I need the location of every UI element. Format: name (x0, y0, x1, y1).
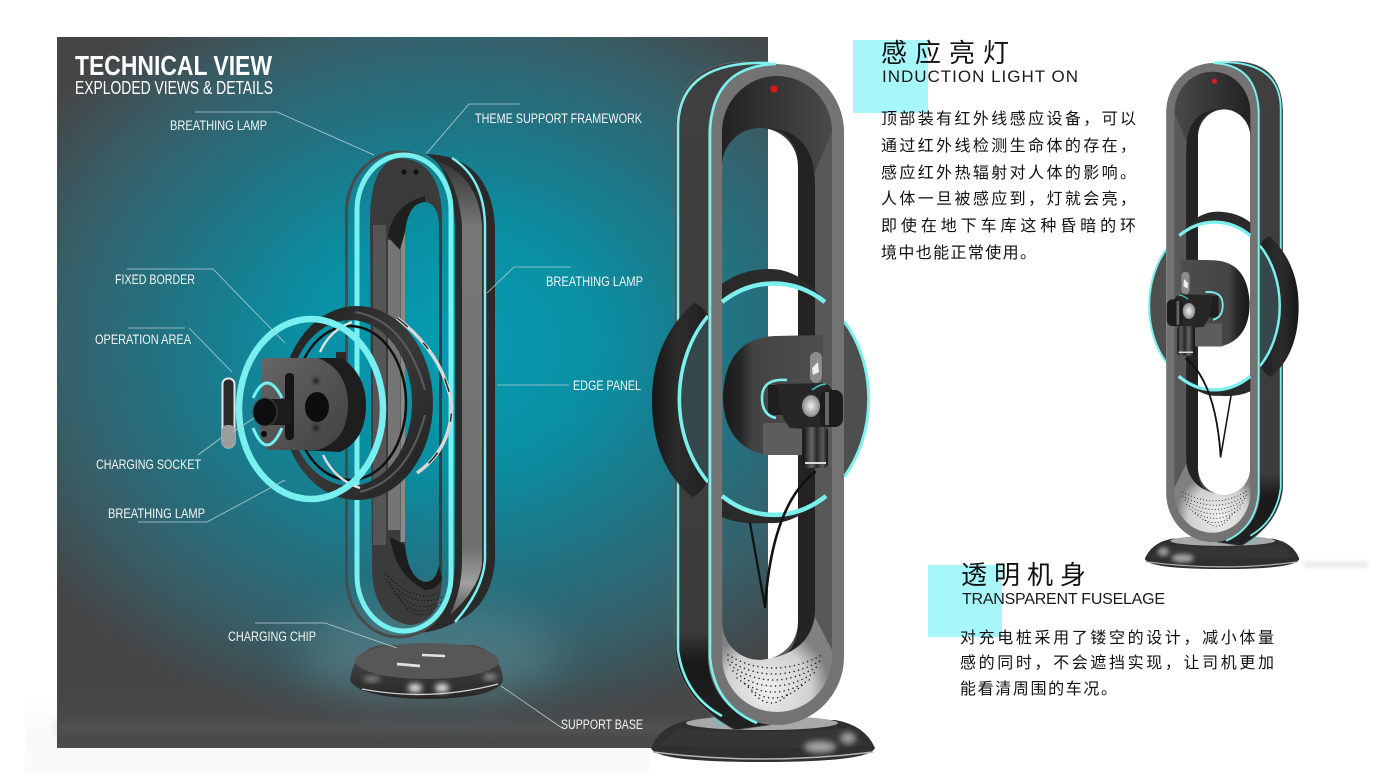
breathing lamp: front ring (239, 319, 383, 499)
callout: theme support framework (426, 104, 642, 154)
heading: induction light on: INDUCTION LIGHT ON (882, 67, 1078, 86)
panel: technical view exploded diagram (57, 37, 768, 748)
callout: operation area: OPERATION AREA (95, 332, 191, 347)
product render: front view (651, 62, 875, 762)
text block: induction light description: 顶部装有红外线感应设备，可以 (881, 109, 1136, 128)
operation hub (260, 352, 366, 452)
heading: transparent fuselage (961, 560, 1165, 608)
callout: operation area (95, 328, 232, 372)
callout: breathing lamp top: BREATHING LAMP (170, 118, 267, 133)
text block: induction light description: 人体一旦被感应到，灯就会亮， (881, 189, 1136, 208)
theme support framework (370, 158, 442, 625)
title (75, 50, 273, 98)
callout: charging chip: CHARGING CHIP (228, 629, 316, 644)
charging plug (762, 380, 843, 468)
callout: breathing lamp right (487, 267, 643, 293)
faint floor shadow (25, 700, 650, 772)
front frame (708, 64, 844, 725)
title: TECHNICAL VIEW (75, 50, 272, 81)
text block: transparent fuselage description: 感的同时，不会遮挡实现，让司机更加 (960, 654, 1274, 672)
accent square: induction light (853, 40, 928, 113)
text block: induction light description (881, 109, 1136, 262)
callout: fixed border: FIXED BORDER (115, 272, 195, 287)
callout: charging socket: CHARGING SOCKET (96, 457, 201, 472)
cable (750, 472, 815, 607)
rear body (675, 62, 780, 730)
text block: induction light description: 通过红外线检测生命体的存在， (881, 137, 1136, 155)
callout: breathing lamp top (170, 112, 374, 155)
product render: rear view (1145, 62, 1299, 569)
support base with charging chip (350, 643, 503, 699)
text block: transparent fuselage description: 对充电桩采用了镂空的设计，减小体量 (960, 629, 1274, 647)
callout: breathing lamp lower (108, 480, 285, 522)
text block: induction light description: 即使在地下车库这种昏暗的环 (881, 217, 1136, 235)
title: EXPLODED VIEWS & DETAILS (75, 78, 273, 98)
operation plate (222, 378, 235, 448)
heading: transparent fuselage: 透明机身 (961, 560, 1086, 590)
callout: theme support framework: THEME SUPPORT FRAMEWORK (475, 111, 642, 126)
text block: transparent fuselage description (960, 629, 1274, 698)
callout: edge panel: EDGE PANEL (573, 378, 641, 393)
hub (723, 335, 823, 455)
callout: charging socket (96, 418, 254, 472)
heading: transparent fuselage: TRANSPARENT FUSELAGE (962, 591, 1165, 608)
callout: support base (501, 686, 643, 732)
text block: transparent fuselage description: 能看清周围的车况。 (960, 680, 1117, 698)
charging socket (253, 383, 292, 445)
callout: support base: SUPPORT BASE (561, 717, 643, 732)
rear body shell (418, 154, 495, 633)
ring behind frame (652, 303, 869, 497)
callout: charging chip (228, 623, 397, 648)
accent square: transparent fuselage (928, 565, 1002, 637)
heading: induction light on (881, 38, 1078, 86)
callout: breathing lamp lower: BREATHING LAMP (108, 506, 205, 521)
ring in front of wall (722, 269, 826, 523)
base (651, 709, 875, 762)
callout: breathing lamp right: BREATHING LAMP (546, 274, 643, 289)
text block: induction light description: 境中也能正常使用。 (881, 243, 1036, 262)
callout: fixed border (115, 269, 285, 343)
breathing lamp: outer oval (346, 152, 452, 637)
heading: induction light on: 感应亮灯 (881, 38, 1009, 68)
exploded product diagram (222, 152, 503, 699)
text block: induction light description: 感应红外热辐射对人体的影响。 (881, 163, 1136, 182)
shadow under rear view (1304, 561, 1368, 568)
edge panel rings (281, 306, 452, 500)
